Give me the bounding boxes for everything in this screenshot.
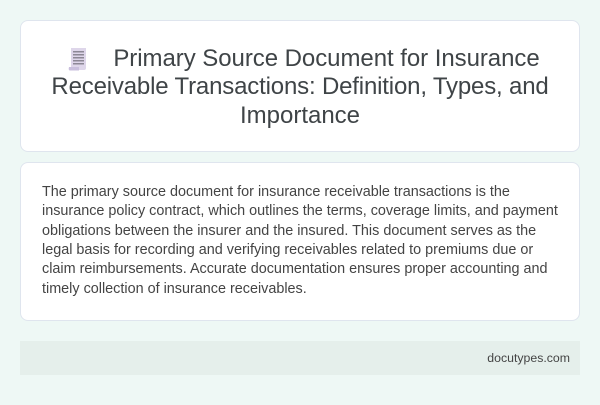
panel: title card	[20, 20, 580, 152]
title: Importance	[240, 102, 360, 129]
text block: description: claim reimbursements. Accurate documentation ensures proper accounting and	[42, 261, 548, 277]
text block: description: The primary source document for insurance receivable transactions is the	[42, 184, 510, 200]
title: Primary Source Document for Insurance	[113, 45, 540, 72]
panel: description card	[20, 162, 580, 321]
footer text: site name: docutypes.com	[487, 351, 570, 365]
text block: description: legal basis for recording and verifying receivables related to premiums due or	[42, 242, 533, 258]
title	[51, 45, 549, 129]
text block: description: timely collection of insurance receivables.	[42, 281, 307, 297]
text block: description: obligations between the insurer and the insured. This document serves as the	[42, 223, 536, 239]
text block: description: insurance policy contract, which outlines the terms, coverage limits, and payment	[42, 203, 558, 219]
title: Receivable Transactions: Definition, Types, and	[51, 73, 549, 100]
footer bar	[20, 341, 580, 375]
icon: document receipt	[68, 48, 86, 70]
text block: description	[42, 184, 558, 297]
